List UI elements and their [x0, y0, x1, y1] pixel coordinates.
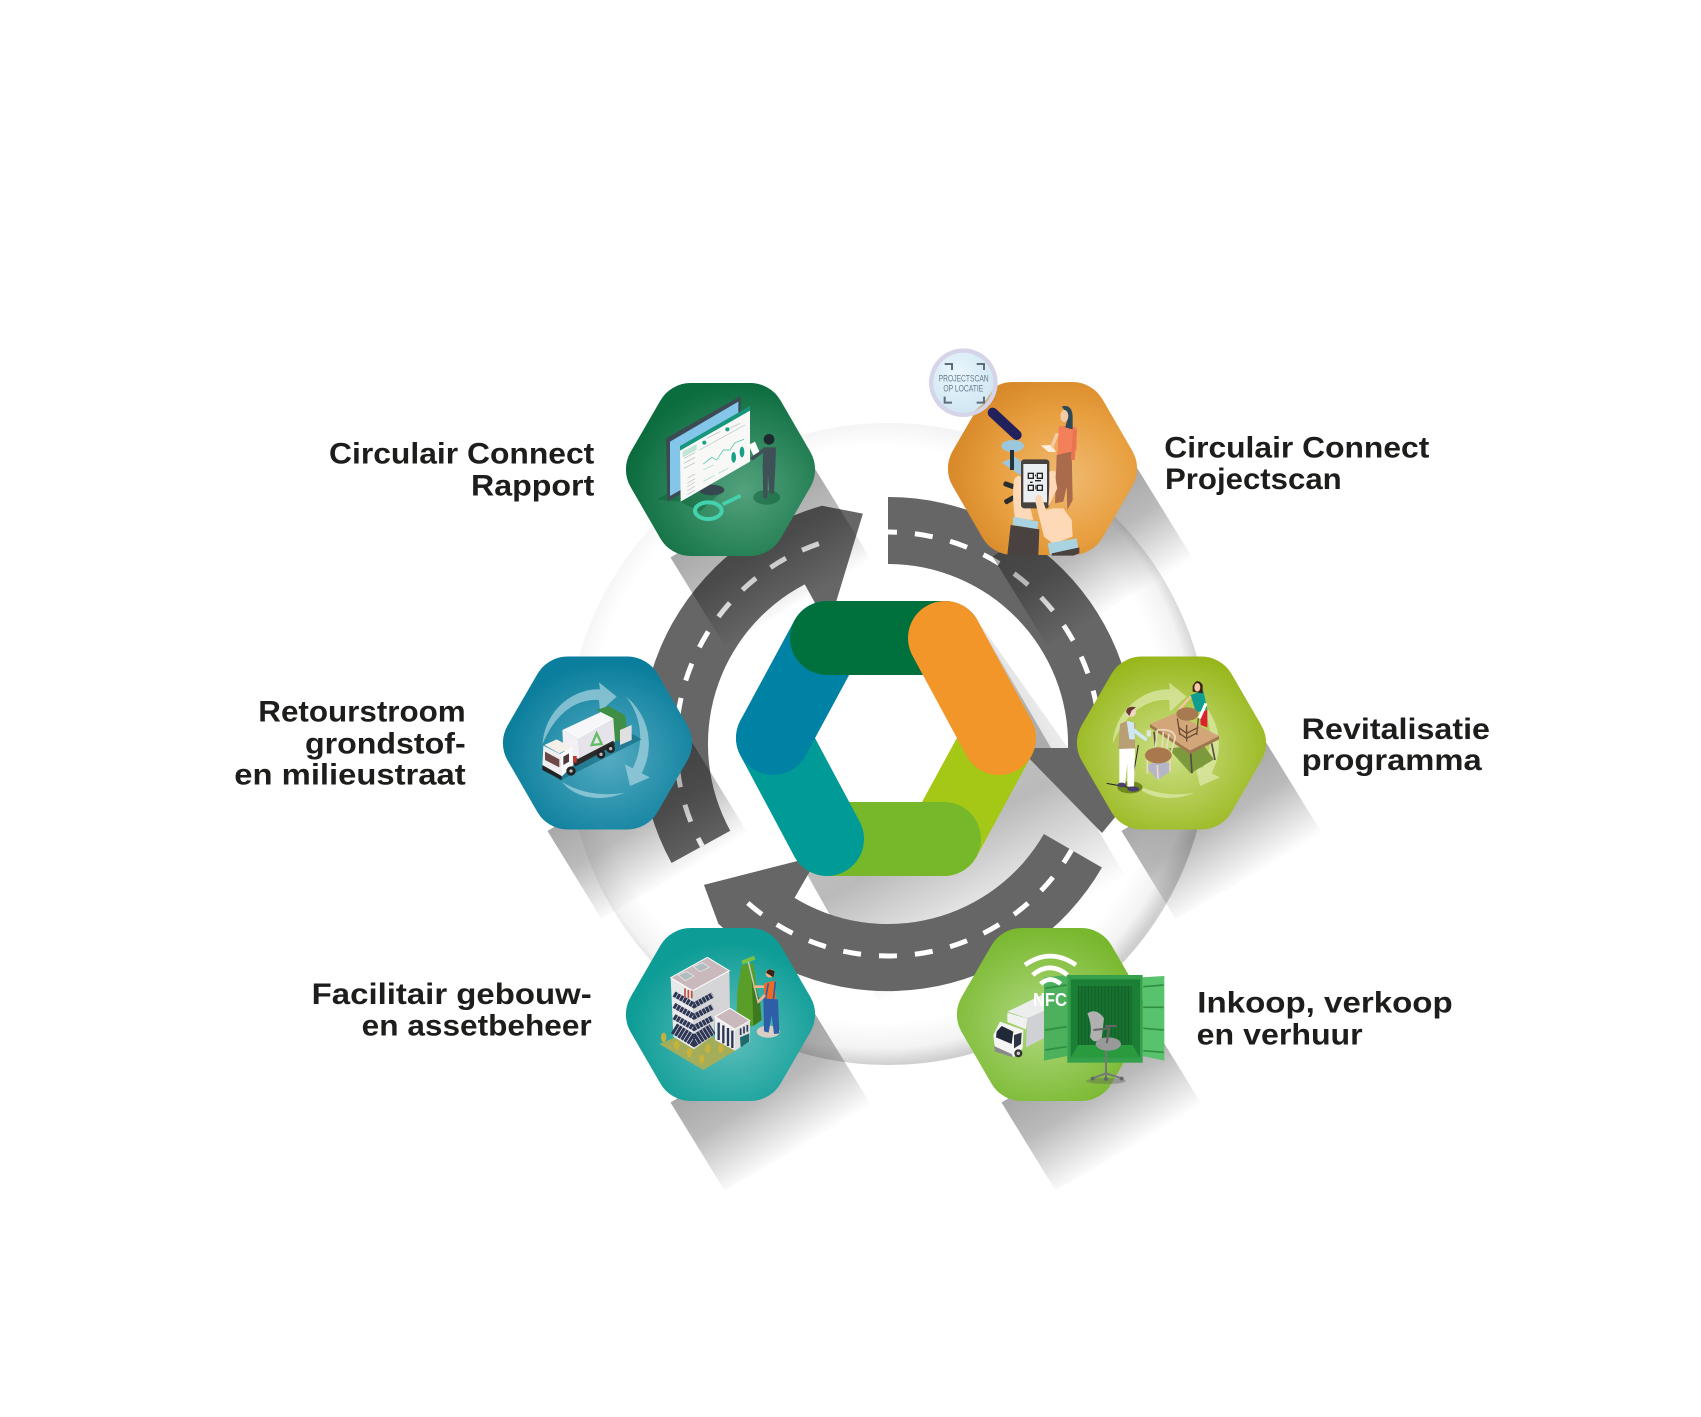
- magnifier text: PROJECTSCAN: [939, 373, 989, 383]
- label: Revitalisatie programma: programma: [1302, 744, 1482, 777]
- magnifier text: OP LOCATIE: [943, 383, 983, 393]
- icon: restoring chairs on a table: [1107, 681, 1220, 798]
- label: Inkoop, verkoop en verhuur: en verhuur: [1197, 1018, 1363, 1051]
- label: Circulair Connect Rapport: Circulair Connect: [329, 437, 594, 470]
- hexagon: Inkoop, verkoop en verhuur: [957, 928, 1164, 1101]
- label: Facilitair gebouw- en assetbeheer: en assetbeheer: [362, 1010, 592, 1043]
- central hexagon logo: [773, 638, 999, 839]
- icon: garbage truck in recycling arrows: [542, 682, 650, 798]
- icon: office building and gardener: [659, 957, 780, 1070]
- hexagon: Revitalisatie programma: [1077, 656, 1266, 830]
- road segment upper right: [888, 497, 1135, 833]
- label: Circulair Connect Rapport: Rapport: [471, 469, 594, 502]
- long hexagon shadows: [548, 468, 1322, 1190]
- hexagon: Facilitair gebouw- en assetbeheer: [626, 928, 815, 1101]
- icon: dashboard monitor, analyst and magnifier: [657, 396, 780, 519]
- icon: magnifier with Projectscan op locatie: [929, 348, 1017, 435]
- label: Inkoop, verkoop en verhuur: Inkoop, verkoop: [1197, 987, 1453, 1020]
- label: Retourstroom grondstof- en milieustraat: grondstof-: [305, 727, 466, 760]
- logo shadow: [741, 620, 1133, 1020]
- label: Retourstroom grondstof- en milieustraat: en milieustraat: [234, 758, 466, 791]
- label: Retourstroom grondstof- en milieustraat: Retourstroom: [258, 696, 466, 729]
- label: Circulair Connect Projectscan: Projectscan: [1165, 463, 1342, 496]
- icon: phone with QR code, woman and chair: [1001, 406, 1079, 556]
- road segment bottom: [687, 700, 1102, 1082]
- label: Facilitair gebouw- en assetbeheer: Facilitair gebouw-: [312, 978, 592, 1011]
- hexagon: Circulair Connect Rapport: [626, 383, 815, 556]
- label: Circulair Connect Projectscan: Circulair Connect: [1164, 432, 1429, 465]
- road ring: [552, 485, 1135, 1082]
- hexagon: Circulair Connect Projectscan: [948, 382, 1137, 556]
- hexagon: Retourstroom grondstof- en milieustraat: [503, 656, 692, 830]
- NFC label: NFC: [1033, 989, 1067, 1010]
- label: Revitalisatie programma: Revitalisatie: [1302, 713, 1490, 746]
- icon: NFC signal, truck, container and office chair: [993, 956, 1164, 1084]
- magnifier text: [939, 373, 989, 393]
- road segment left: [552, 485, 966, 863]
- background disc: [567, 423, 1209, 1065]
